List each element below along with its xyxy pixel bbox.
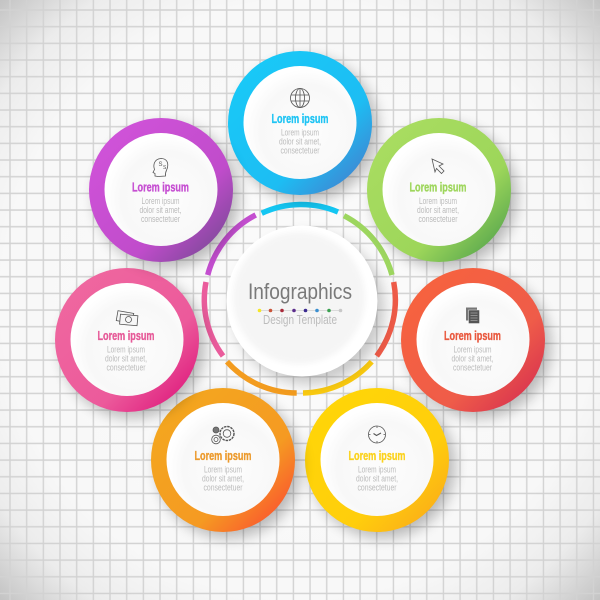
body text: dolor sit amet, <box>140 205 182 215</box>
arc: purple <box>208 215 256 275</box>
arc: red <box>377 282 395 356</box>
panel: purple circle <box>89 118 239 268</box>
body text: consectetuer <box>358 482 397 492</box>
body text <box>452 344 494 372</box>
icon: head: S <box>163 165 167 171</box>
icon: globe <box>290 88 310 108</box>
arc: blue <box>262 205 338 213</box>
body text: dolor sit amet, <box>279 136 321 146</box>
arc: orange <box>227 362 297 393</box>
body text <box>202 464 244 492</box>
body text <box>140 196 182 224</box>
body text: Lorem ipsum <box>454 344 492 354</box>
body text: consectetuer <box>418 214 458 224</box>
body text: consectetuer <box>106 362 146 372</box>
colored dots line <box>258 309 342 312</box>
panel: pink circle <box>55 268 205 418</box>
panel: green circle <box>367 118 517 268</box>
body text: consectetuer <box>280 146 320 156</box>
icon: gears <box>212 426 234 444</box>
panel: red circle <box>401 268 551 418</box>
label: Lorem ipsum <box>410 180 466 194</box>
arc: green <box>344 216 392 275</box>
body text <box>279 128 321 156</box>
body text: Lorem ipsum <box>281 128 319 138</box>
arc: pink <box>204 282 223 356</box>
label: Lorem ipsum <box>98 329 154 343</box>
body text: consectetuer <box>453 362 492 372</box>
label: Lorem ipsum <box>272 112 328 126</box>
label: Lorem ipsum <box>444 329 501 343</box>
panel: center title disc <box>226 226 384 384</box>
icon: clock <box>368 426 386 443</box>
panel: yellow circle <box>305 388 455 538</box>
icon: head: S <box>158 162 163 168</box>
segmented ring around center <box>204 205 395 393</box>
body text: dolor sit amet, <box>202 474 244 484</box>
icon: documents <box>466 308 480 324</box>
body text: consectetuer <box>204 482 243 492</box>
panel: blue circle <box>228 51 378 201</box>
body text: Lorem ipsum <box>107 344 145 354</box>
body text <box>417 196 459 224</box>
arc: yellow <box>303 362 372 393</box>
icon: money <box>116 311 138 326</box>
body text: Lorem ipsum <box>204 464 242 474</box>
body text: dolor sit amet, <box>356 474 398 484</box>
body text: consectetuer <box>141 214 180 224</box>
body text: dolor sit amet, <box>452 354 494 364</box>
heading: Infographics: Infographics <box>248 279 352 304</box>
body text <box>356 464 398 492</box>
icon: cursor <box>432 159 444 174</box>
body text: Lorem ipsum <box>419 196 457 206</box>
body text: Lorem ipsum <box>358 464 396 474</box>
body text <box>105 344 147 372</box>
icon: head <box>153 158 168 176</box>
subheading: Design Template: Design Template <box>263 313 337 327</box>
panel: orange circle <box>151 388 301 538</box>
body text: Lorem ipsum <box>142 196 180 206</box>
body text: dolor sit amet, <box>417 205 459 215</box>
label: Lorem ipsum <box>348 449 406 463</box>
label: Lorem ipsum <box>132 180 189 194</box>
body text: dolor sit amet, <box>105 354 147 364</box>
label: Lorem ipsum <box>194 449 252 463</box>
